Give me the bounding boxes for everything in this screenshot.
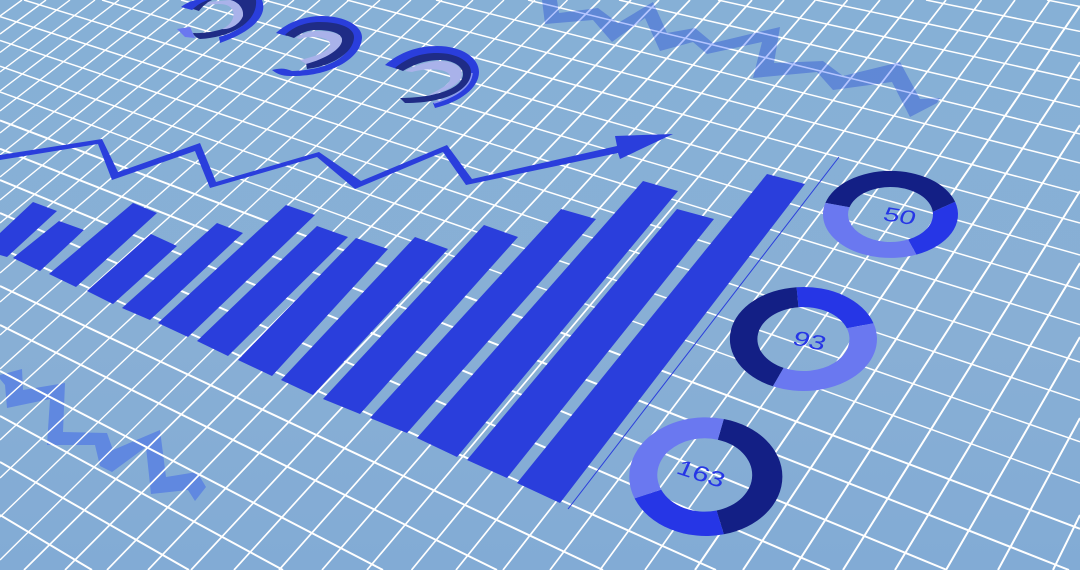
donut chart: 50 <box>823 171 958 258</box>
donut chart: 163 <box>629 417 782 536</box>
donut value: 93: 93 <box>789 327 830 355</box>
faint zigzag line, lower left <box>0 369 206 501</box>
donut value: 50: 50 <box>880 203 919 230</box>
rising trend line with arrow <box>0 134 673 189</box>
progress arc 2 <box>272 16 362 76</box>
bar chart <box>0 174 805 503</box>
chart axis line <box>568 157 839 509</box>
donut chart: 93 <box>730 287 877 391</box>
progress arc 3 <box>385 46 479 108</box>
progress arc 1 <box>177 0 263 43</box>
donut value: 163: 163 <box>673 456 729 493</box>
faint zigzag line, upper right <box>542 0 940 117</box>
